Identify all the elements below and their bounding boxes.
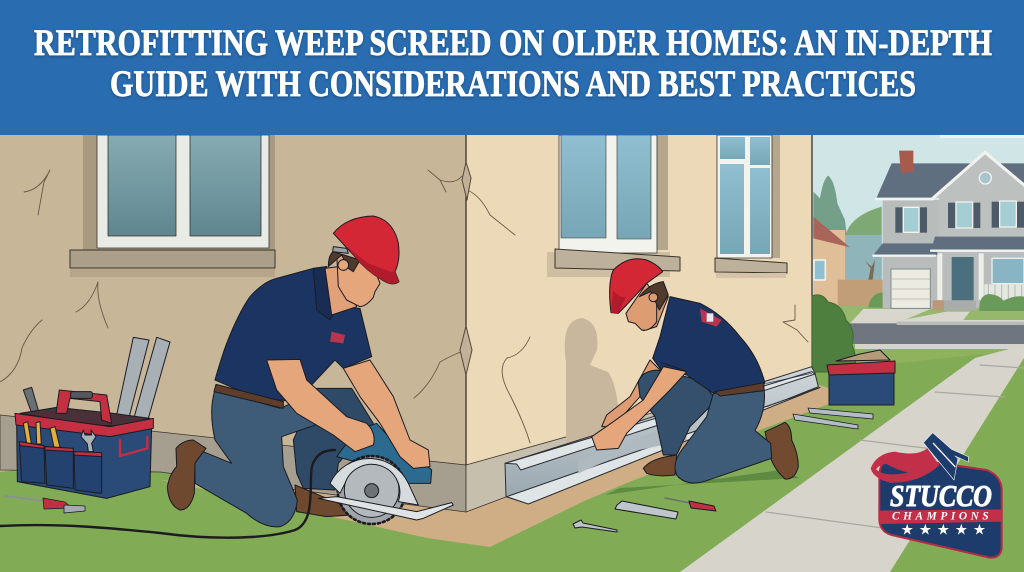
- front boot: [295, 485, 352, 517]
- shirt: [653, 297, 765, 393]
- saw disc: [344, 463, 399, 517]
- tool bag: [15, 337, 170, 498]
- far leg: [293, 388, 373, 490]
- red swoosh: [871, 448, 939, 483]
- right wall window one: [547, 135, 680, 277]
- bag rim: [15, 413, 153, 437]
- far leg: [638, 370, 717, 455]
- background house and neighbourhood: [813, 151, 1024, 345]
- worker one with saw: [167, 216, 453, 527]
- stucco cracks: [0, 170, 808, 443]
- neighbour house: [813, 217, 850, 305]
- lawn and driveway: [838, 306, 1024, 326]
- yellow tool handles: [23, 422, 60, 447]
- rear boot: [765, 422, 798, 479]
- title text: [34, 23, 992, 105]
- red ribbon band: [879, 509, 1002, 524]
- window sill: [70, 250, 275, 268]
- near arm: [592, 367, 687, 450]
- saw power cord: [0, 450, 335, 538]
- grey tool: [23, 387, 40, 416]
- window sill: [555, 249, 680, 271]
- left foundation: [0, 415, 466, 512]
- bag interior: [20, 407, 150, 428]
- window glass: [108, 135, 176, 236]
- saw base plate: [318, 497, 453, 520]
- wrench: [81, 430, 96, 452]
- hard hat: [610, 259, 663, 313]
- bag pockets: [19, 442, 45, 483]
- corner crack: [460, 326, 472, 375]
- ground: dirt band: [160, 385, 850, 547]
- saw motor: [337, 423, 432, 483]
- grass shadow under worker two: [605, 470, 800, 495]
- collar: [313, 267, 337, 320]
- handle grip: [71, 392, 92, 398]
- five stars: ★★★★★: [901, 521, 986, 538]
- shirt logo: [330, 332, 345, 343]
- metal plate: [615, 501, 678, 519]
- house body: [868, 151, 1024, 311]
- sleeve hem: [662, 363, 685, 371]
- neck: [325, 267, 357, 315]
- hair: [639, 282, 668, 310]
- right wall: [466, 135, 812, 465]
- far arm: [343, 360, 430, 468]
- window frame: [83, 135, 275, 250]
- bag body: [17, 423, 152, 498]
- side handle: [120, 437, 147, 456]
- handle: [56, 390, 112, 423]
- belt: [214, 384, 283, 408]
- saw hub: [365, 484, 379, 498]
- near leg: [675, 388, 772, 483]
- strip of pale path: [855, 344, 1024, 349]
- near arm: [267, 359, 374, 452]
- corner foundation: [466, 368, 812, 512]
- second toolbox: [827, 350, 895, 405]
- badge shield: [879, 457, 1002, 558]
- window sill: [715, 258, 787, 273]
- trees: [813, 176, 882, 280]
- loose metal strips: [793, 408, 873, 429]
- worker shadow on wall: [565, 318, 620, 447]
- wrench: [573, 520, 617, 532]
- far arm: [602, 360, 660, 427]
- front boot: [643, 455, 677, 476]
- hard hat: [333, 216, 399, 284]
- logo: Stucco Champions: [871, 433, 1002, 558]
- shirt: [215, 267, 372, 402]
- face: [337, 253, 380, 307]
- title banner: [0, 0, 1024, 135]
- right wall window two: [715, 135, 787, 273]
- street: [850, 322, 1024, 345]
- left wall: [0, 135, 466, 465]
- background scene: sky: [812, 135, 1024, 335]
- wall corner line: [466, 135, 812, 465]
- rear boot: [167, 440, 206, 510]
- ground: foreground grass: [0, 350, 1024, 572]
- metal strips in bag: [115, 337, 149, 423]
- shirt logo: [700, 308, 722, 327]
- hair: [328, 252, 360, 272]
- worker two kneeling: [592, 259, 798, 483]
- hard hat strap: [333, 247, 348, 253]
- fence: [838, 280, 883, 306]
- saw guard: [330, 459, 418, 505]
- saw blade: [338, 456, 406, 524]
- left wall window: [70, 135, 275, 277]
- neck: [643, 297, 668, 331]
- window shadow: [547, 252, 670, 277]
- screwdriver left: [5, 496, 85, 513]
- brand name: STUCCO: [890, 479, 992, 513]
- light patch in sky: [940, 135, 1024, 138]
- lawn strip behind the sidewalk: [840, 344, 1024, 374]
- brand tagline: CHAMPIONS: [892, 510, 989, 522]
- screwdriver: [665, 498, 690, 503]
- window sill shadow right: [716, 273, 786, 278]
- weep screed metal profile: [505, 367, 820, 504]
- near leg: [195, 390, 320, 527]
- belt: [715, 383, 764, 396]
- hedge bush: [812, 295, 856, 372]
- small tools on ground: [573, 498, 716, 532]
- trowel: [923, 433, 968, 480]
- face: [626, 283, 657, 330]
- corner crack upper: [462, 162, 471, 200]
- sidewalk: [680, 345, 1024, 572]
